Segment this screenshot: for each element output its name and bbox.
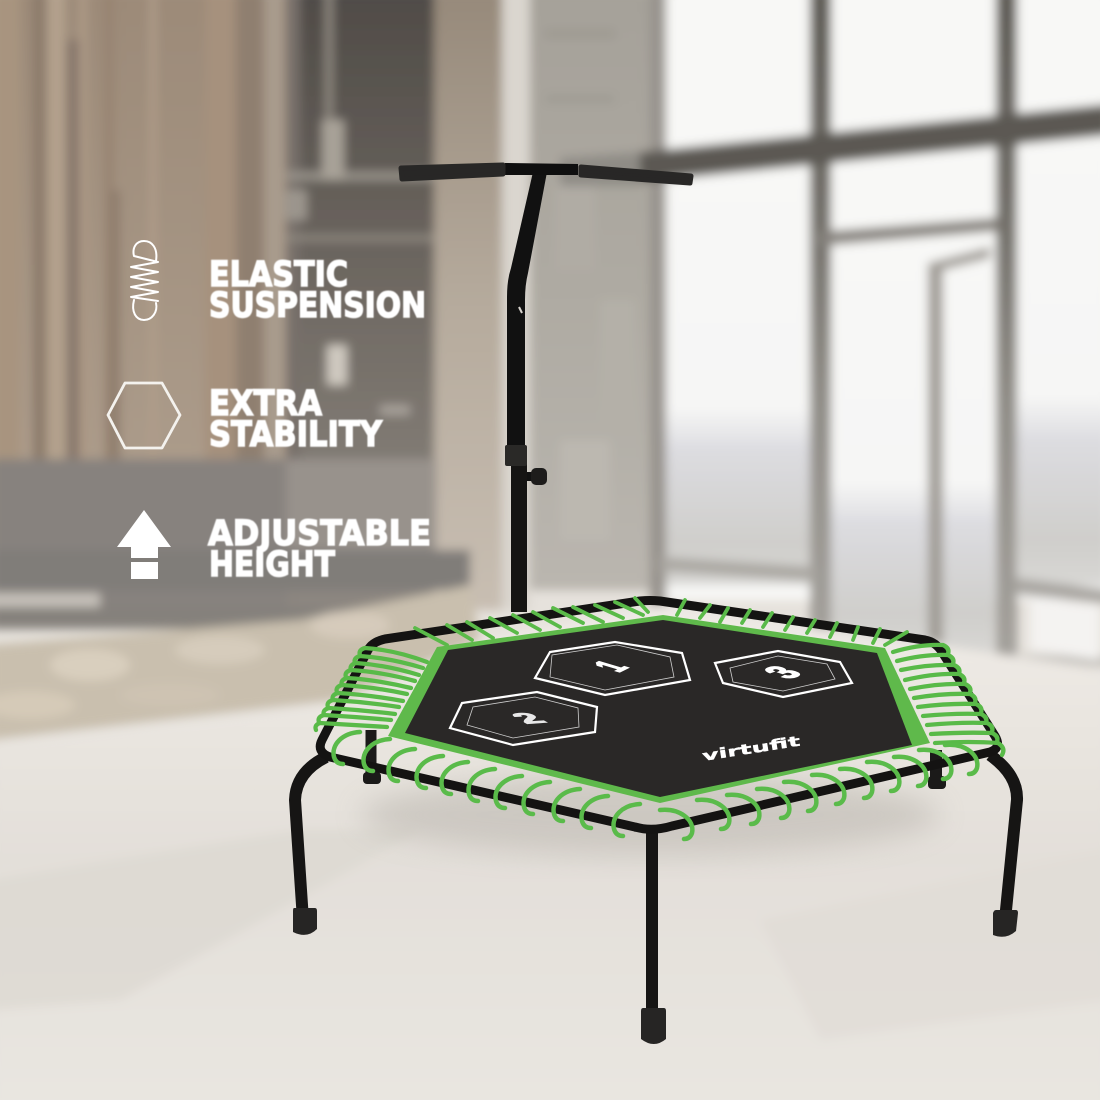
- floor shadow under trampoline: [360, 775, 940, 855]
- hexagon 1: [535, 642, 690, 695]
- hexagon 2: 2: [504, 710, 554, 727]
- window panes and frames: [560, 0, 1100, 680]
- hexagon 3: [715, 651, 852, 697]
- right side bungee cords: [893, 645, 1003, 755]
- text: extra stability: EXTRA: [209, 384, 322, 424]
- text: elastic suspension: [209, 255, 426, 326]
- handle post: [505, 172, 547, 612]
- text: adjustable height: HEIGHT: [209, 545, 335, 585]
- text: adjustable height: [208, 514, 431, 585]
- lower wall band: [0, 459, 470, 629]
- text: extra stability: STABILITY: [209, 415, 383, 455]
- black jumping mat: [405, 620, 912, 797]
- icon: up arrow: [117, 510, 171, 579]
- left side bungee cords: [316, 648, 427, 730]
- bottom right bungee loops: [660, 745, 977, 839]
- trampoline: [293, 163, 1018, 1044]
- feature list: [108, 241, 431, 585]
- front and side legs: [295, 755, 1017, 1015]
- hexagon 2: [450, 692, 597, 745]
- brand logo: virtufit: [701, 734, 802, 765]
- text: elastic suspension: ELASTIC: [209, 255, 348, 295]
- floor: [0, 597, 1100, 1100]
- hexagon 3: 3: [754, 662, 812, 682]
- wood panel wall: [0, 0, 286, 465]
- icon: hexagon: [108, 383, 180, 448]
- top bungee cords: [415, 598, 907, 645]
- hexagon 1: 1: [584, 657, 637, 675]
- text: elastic suspension: SUSPENSION: [209, 286, 426, 326]
- text: extra stability: [209, 384, 383, 455]
- green mat border: [388, 615, 930, 803]
- bottom left bungee loops: [334, 732, 640, 836]
- rear legs: [363, 730, 946, 789]
- handlebar with grips: [401, 163, 691, 183]
- stacked logs: [0, 585, 480, 740]
- text: adjustable height: ADJUSTABLE: [208, 514, 431, 554]
- rubber feet: [293, 908, 1018, 1044]
- dark shelving: [285, 0, 436, 610]
- metal frame: [320, 600, 998, 829]
- icon: spring: [131, 241, 158, 320]
- structural beam and stone wall: [434, 0, 655, 610]
